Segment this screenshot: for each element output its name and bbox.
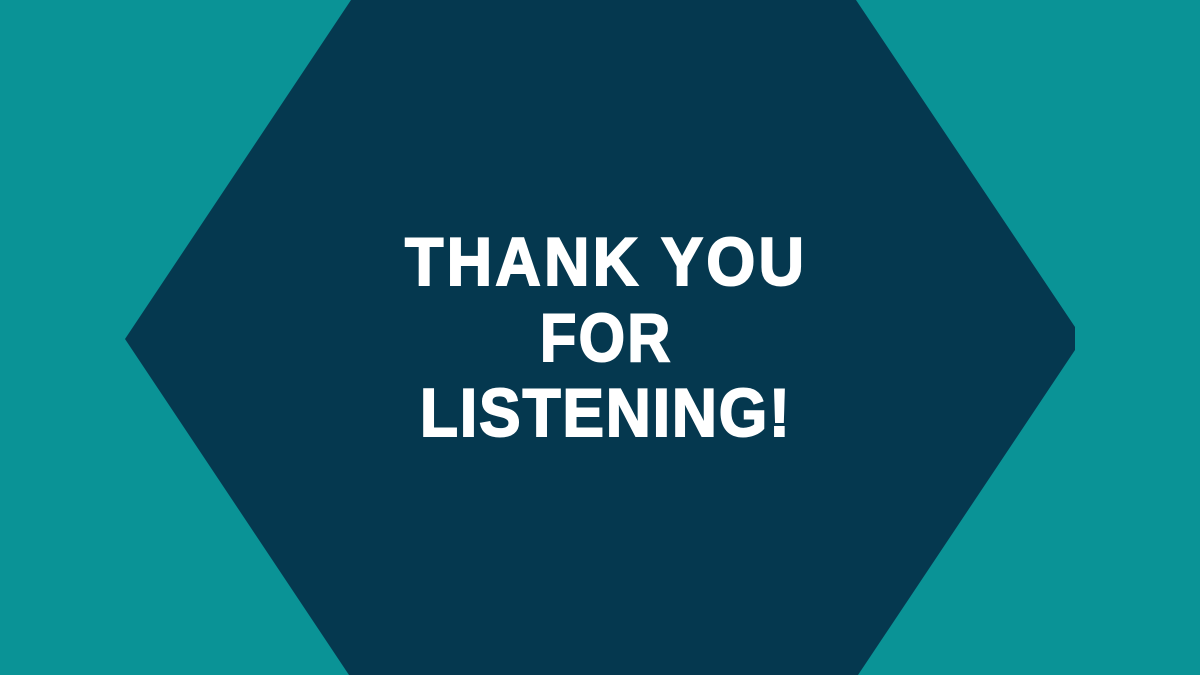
title: thank you for listening: [405, 224, 804, 451]
title: thank you for listening: LISTENING!: [420, 375, 790, 451]
title: thank you for listening: THANK YOU: [405, 224, 804, 299]
title: thank you for listening: FOR: [540, 300, 670, 376]
navy hexagon panel: [125, 0, 1075, 675]
